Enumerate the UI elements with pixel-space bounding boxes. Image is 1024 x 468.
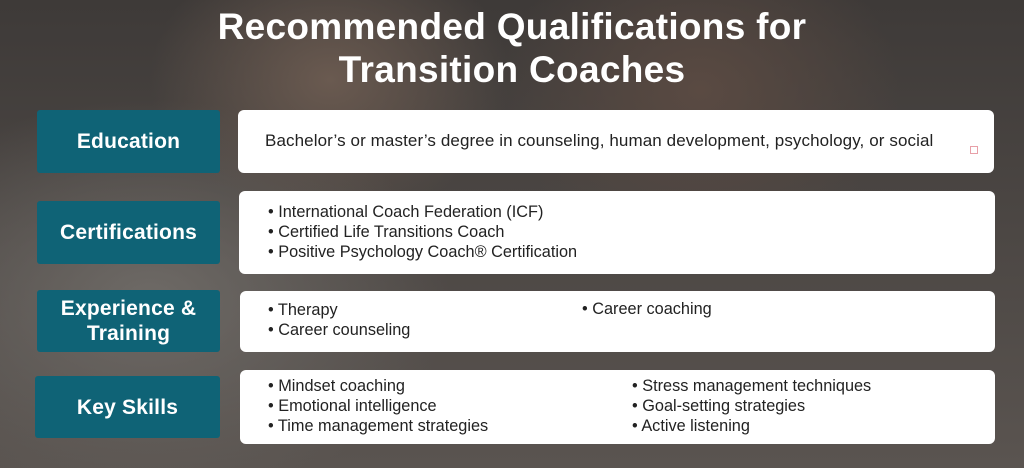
label: education: Education xyxy=(77,130,180,153)
panel: certifications: • International Coach Federation (ICF) xyxy=(268,203,543,221)
label: key skills xyxy=(35,376,220,438)
panel: certifications: • Positive Psychology Coach® Certification xyxy=(268,243,577,261)
panel: key skills: • Goal-setting strategies xyxy=(632,397,805,415)
panel: key skills xyxy=(240,370,995,444)
panel: experience: • Therapy xyxy=(268,301,338,319)
title: Transition Coaches xyxy=(339,49,685,90)
panel: certifications: • Certified Life Transitions Coach xyxy=(268,223,504,241)
panel: key skills: • Stress management techniques xyxy=(632,377,871,395)
panel: experience xyxy=(240,291,995,352)
panel: education xyxy=(238,110,994,173)
panel: key skills: • Emotional intelligence xyxy=(268,397,437,415)
label: education xyxy=(37,110,220,173)
panel: experience: • Career counseling xyxy=(268,321,410,339)
panel: experience: • Career coaching xyxy=(582,300,712,318)
title xyxy=(218,6,806,90)
label: certifications: Certifications xyxy=(60,221,197,244)
label: experience: Experience & xyxy=(61,297,196,320)
panel: key skills: • Time management strategies xyxy=(268,417,488,435)
panel: key skills: • Active listening xyxy=(632,417,750,435)
label: experience xyxy=(37,290,220,352)
panel: key skills: • Mindset coaching xyxy=(268,377,405,395)
label: experience: Training xyxy=(87,322,170,345)
icon: small marker xyxy=(970,146,978,154)
label: key skills: Key Skills xyxy=(77,396,178,418)
panel: certifications xyxy=(239,191,995,274)
panel: education: Bachelor’s or master’s degree in counseling, human development, psychology, or social xyxy=(265,131,933,150)
title: Recommended Qualifications for xyxy=(218,6,806,47)
label: certifications xyxy=(37,201,220,264)
